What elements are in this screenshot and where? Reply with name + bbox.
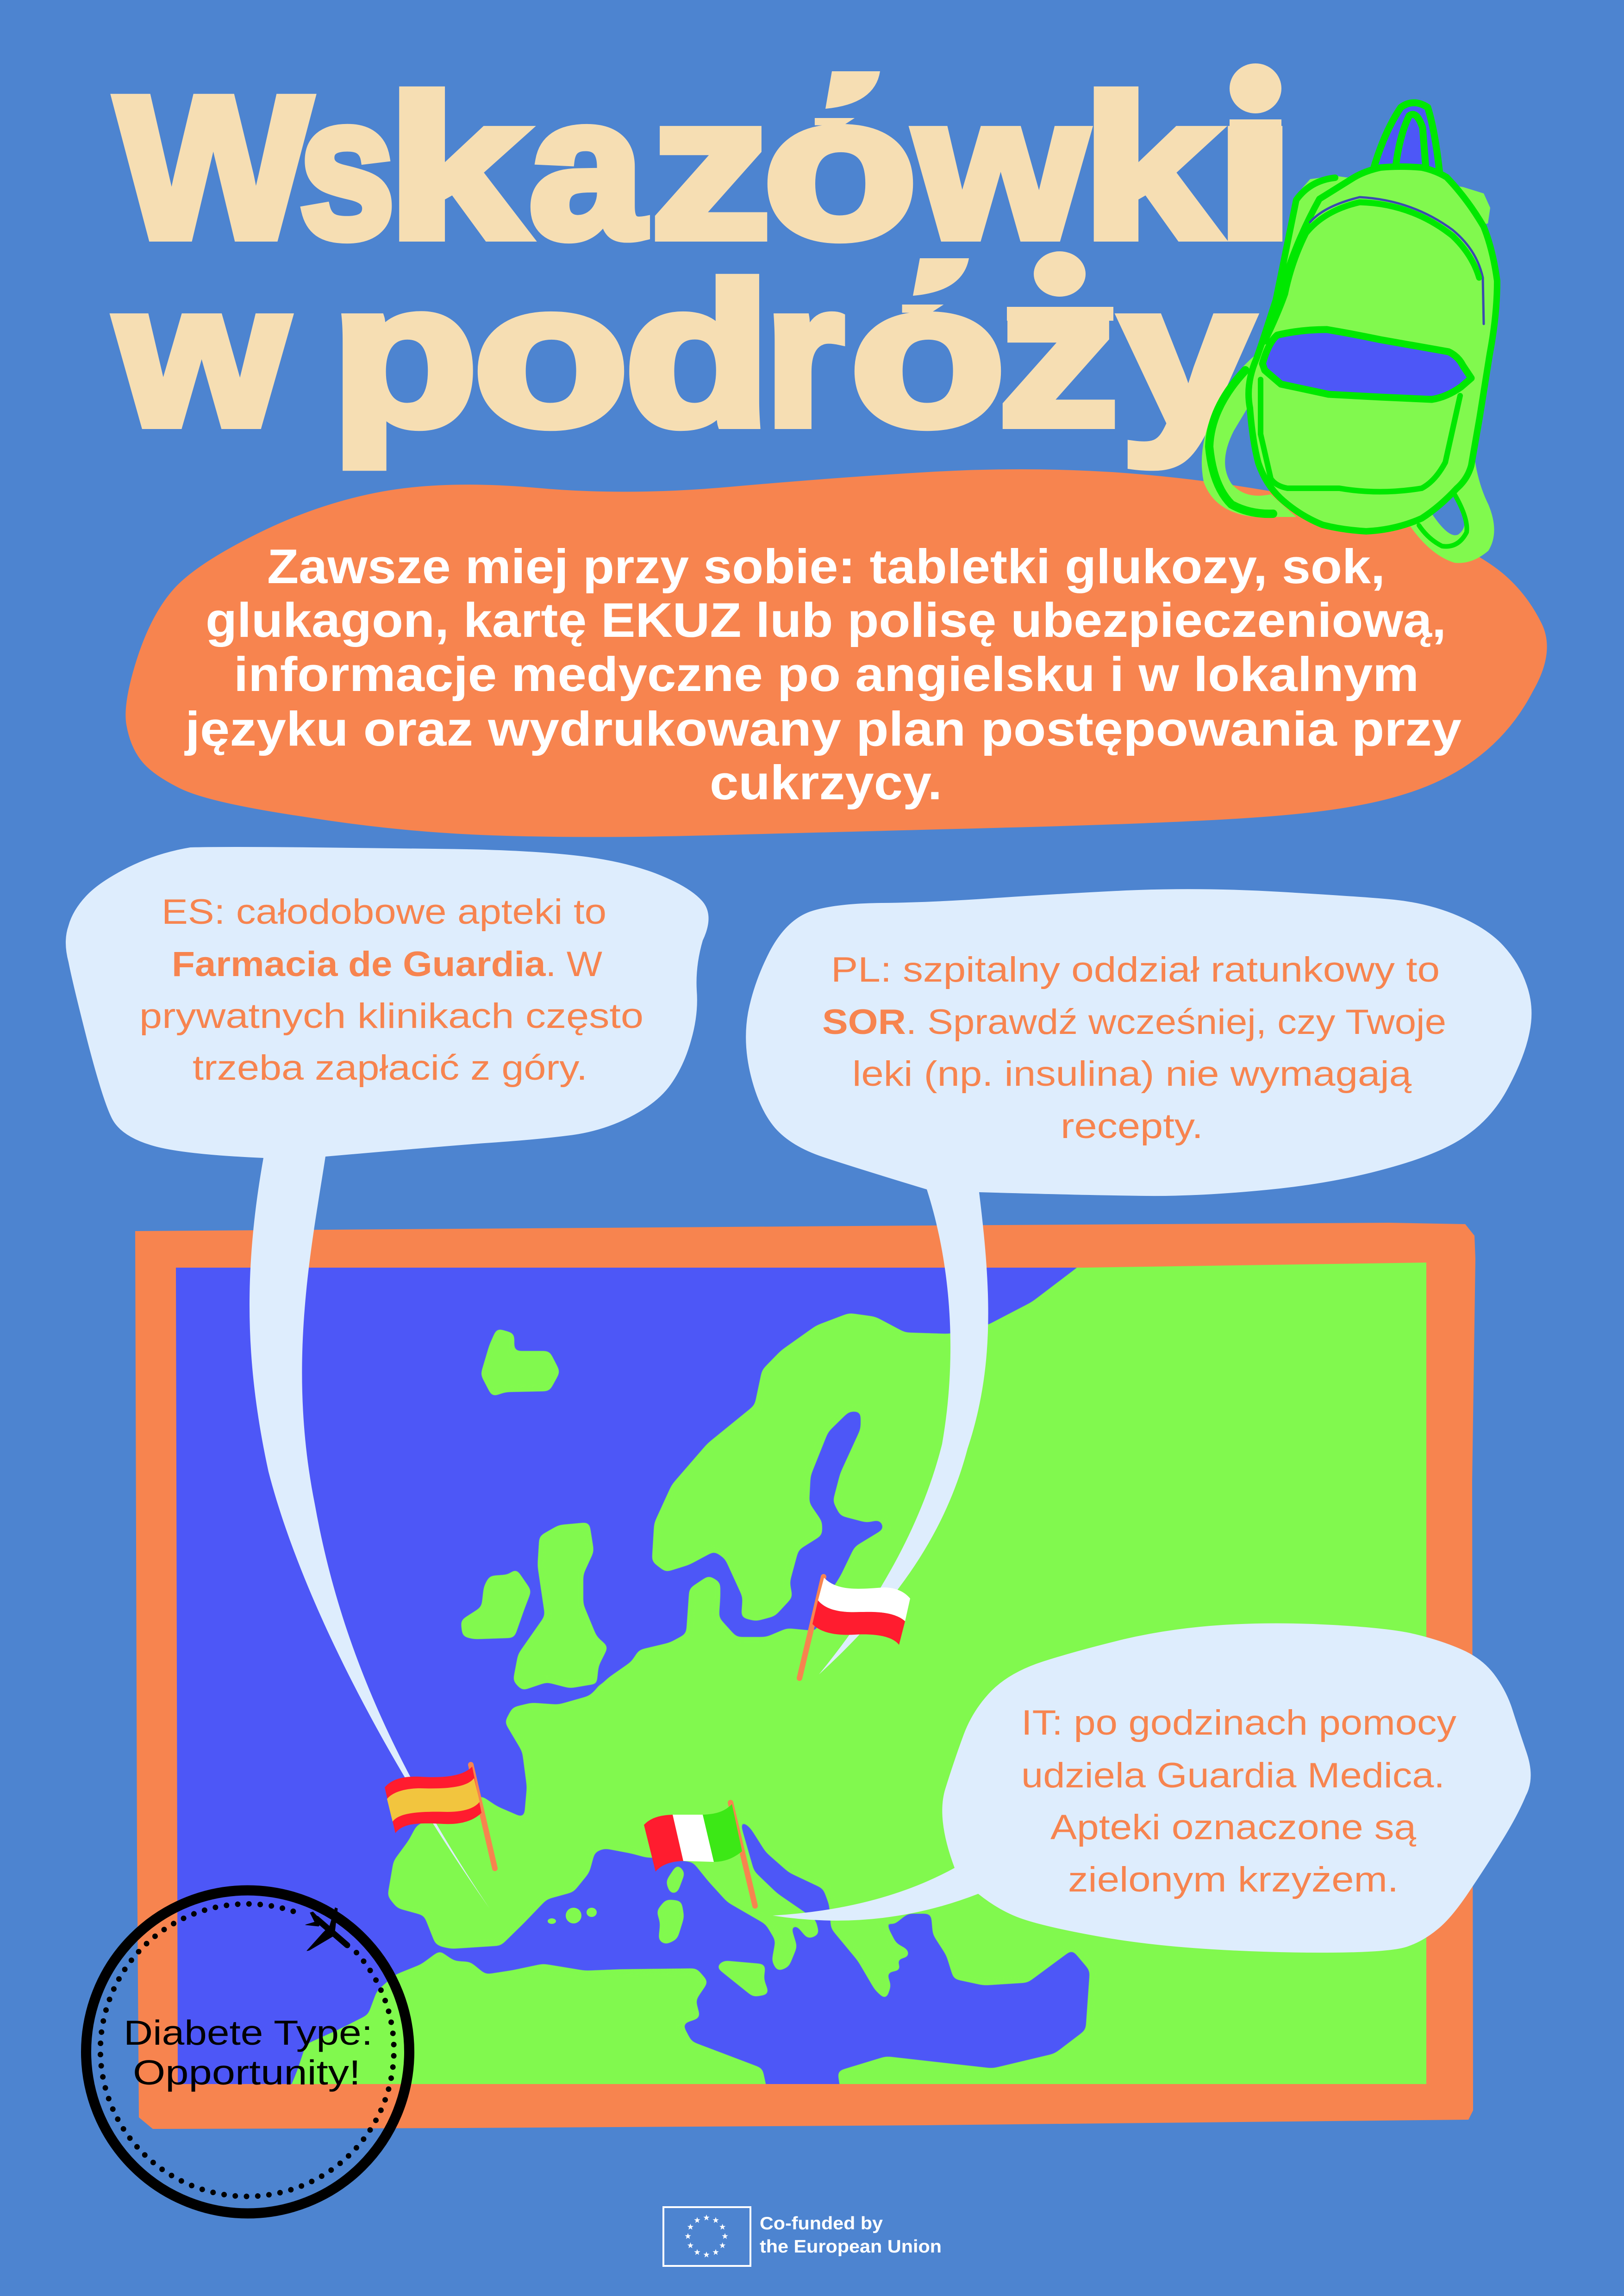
Poland text: recepty. [1061, 1107, 1203, 1146]
title: ż [999, 243, 1118, 467]
flag pole: Poland [800, 1577, 824, 1678]
backpack back panel [1256, 176, 1490, 370]
packing list text [184, 540, 1462, 810]
North Africa [285, 1951, 769, 2101]
Italy text [1021, 1703, 1456, 1899]
icon: EU flag [663, 2207, 750, 2266]
Spain text: trzeba zapłacić z góry. [193, 1048, 587, 1088]
flag pole: Spain [471, 1765, 495, 1868]
mainland Europe [387, 1250, 1444, 2101]
stamp text: Diabete Type: [124, 2013, 373, 2052]
speech bubble: Spain [66, 847, 709, 1908]
icon: backpack [1202, 100, 1497, 563]
Spain text: ES: całodobowe apteki to [162, 892, 606, 932]
title: y [1121, 243, 1254, 468]
flag: Poland [812, 1578, 910, 1645]
Italy text: Apteki oznaczone są [1050, 1808, 1417, 1847]
Italy text: zielonym krzyżem. [1068, 1860, 1399, 1899]
Italy text: udziela Guardia Medica. [1021, 1756, 1445, 1795]
map sea [171, 1259, 1102, 2087]
stamp outer ring [86, 1890, 409, 2213]
packing list text: Zawsze miej przy sobie: tabletki glukozy, sok, [267, 540, 1385, 594]
co-funded text: Co-funded by [760, 2214, 883, 2234]
title: o [474, 243, 628, 467]
backpack top handle [1373, 100, 1440, 174]
Great Britain [513, 1522, 608, 1691]
Spain text: Farmacia de Guardia . W [172, 945, 602, 984]
backpack back outline [1258, 178, 1335, 354]
flag pole: Italy [731, 1803, 755, 1906]
co-funded text [760, 2214, 942, 2257]
backpack pocket [1262, 330, 1471, 399]
title: a [529, 55, 645, 280]
Sardinia [656, 1899, 684, 1945]
title: s [299, 55, 395, 280]
backpack inner arc [1265, 197, 1484, 342]
Spain text: prywatnych klinikach często [139, 996, 643, 1036]
stamp: Diabete Type Opportunity [86, 1890, 409, 2213]
panel: map [135, 1223, 1475, 2129]
stamp text [124, 2013, 373, 2092]
flag: Spain [385, 1767, 481, 1833]
Poland text: SOR. Sprawdź wcześniej, czy Twoje [822, 1002, 1446, 1042]
Corsica [666, 1864, 685, 1893]
title: k [1082, 55, 1219, 280]
backpack main body [1249, 167, 1497, 531]
title: r [765, 243, 843, 467]
title: z [651, 55, 770, 280]
backpack lower pocket seam [1261, 380, 1460, 492]
title: ó [763, 55, 917, 280]
packing list text: informacje medyczne po angielsku i w lokalnym [234, 647, 1419, 702]
backpack left strap [1202, 354, 1296, 517]
Poland text: PL: szpitalny oddział ratunkowy to [831, 950, 1440, 989]
speech bubble: Poland [746, 889, 1531, 1674]
backpack right strap [1409, 450, 1494, 563]
stamp text: Opportunity! [133, 2053, 361, 2092]
stamp dotted ring [100, 1904, 394, 2196]
Ireland [461, 1568, 531, 1639]
title: W [116, 55, 312, 280]
packing list text: glukagon, kartę EKUZ lub polisę ubezpieczeniową, [206, 593, 1446, 647]
title: k [387, 55, 528, 280]
Spain text [139, 892, 643, 1088]
Italy text: IT: po godzinach pomocy [1021, 1703, 1456, 1742]
flag: Italy [644, 1804, 742, 1872]
panel: orange packing list [125, 469, 1547, 837]
title: ó [850, 243, 1005, 467]
title: w [113, 243, 288, 467]
title [113, 55, 1297, 468]
speech bubble: Italy [773, 1624, 1531, 1953]
map land [285, 1250, 1444, 2101]
EU logo and co-funding label [663, 2207, 942, 2266]
title letter details: dots and accents [787, 63, 1288, 321]
title: w [912, 55, 1087, 280]
packing list text: języku oraz wydrukowany plan postępowania przy [184, 702, 1462, 756]
title: i [1214, 55, 1297, 280]
map frame [135, 1223, 1475, 2129]
title: p [331, 243, 477, 468]
title: d [625, 243, 770, 467]
Balearic islands [548, 1908, 597, 1924]
co-funded text: the European Union [760, 2237, 942, 2257]
Iceland [481, 1328, 560, 1397]
packing list text: cukrzycy. [710, 756, 942, 810]
Sicily [716, 1960, 769, 1997]
Poland text: leki (np. insulina) nie wymagają [852, 1054, 1412, 1094]
icon: airplane [306, 1908, 347, 1951]
Poland text [822, 950, 1446, 1146]
